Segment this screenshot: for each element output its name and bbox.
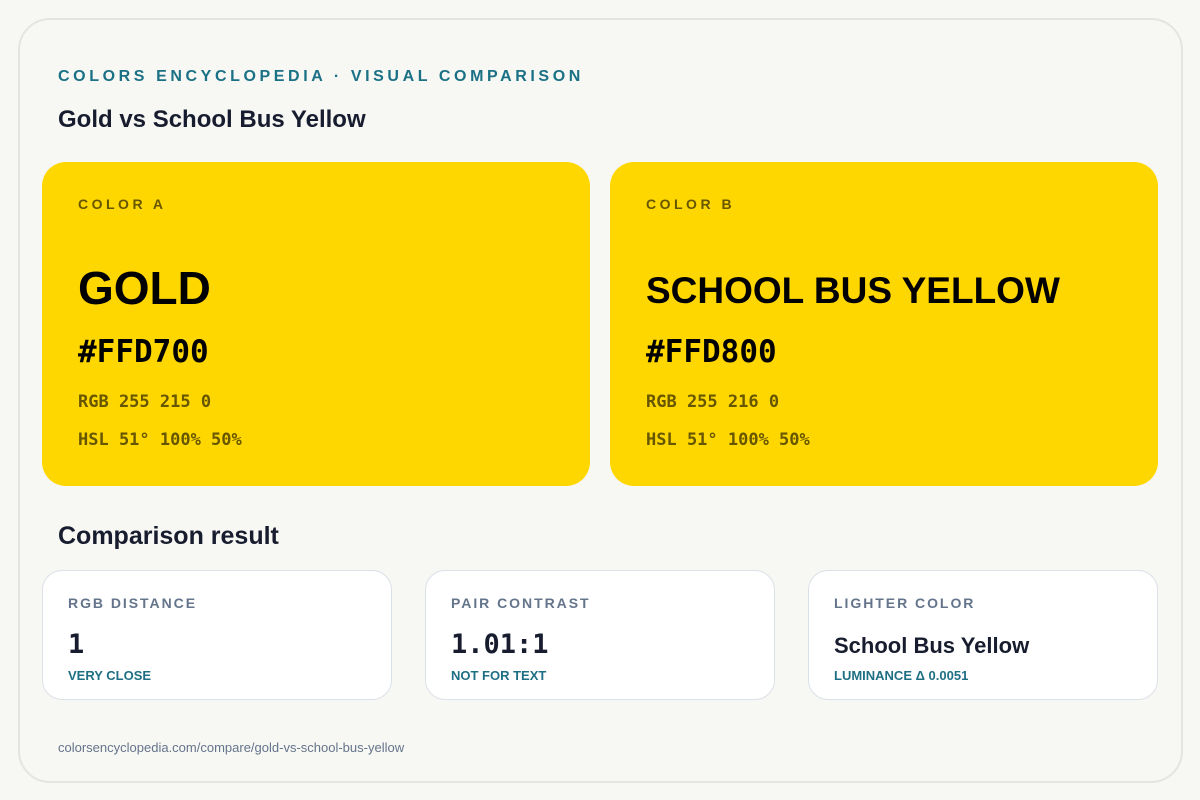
RGB distance label: RGB DISTANCE [68,595,197,611]
RGB distance note: VERY CLOSE [68,668,151,683]
footer source: colorsencyclopedia.com/compare/gold-vs-school-bus-yellow [58,740,404,755]
comparison heading: Comparison result [58,522,279,550]
lighter color note: LUMINANCE Δ 0.0051 [834,668,968,683]
color B label: COLOR B [646,196,735,212]
eyebrow: COLORS ENCYCLOPEDIA · VISUAL COMPARISON [58,68,584,85]
card: pair contrast [425,570,775,700]
color A hex: #FFD700 [78,334,209,370]
card: RGB distance [42,570,392,700]
pair contrast label: PAIR CONTRAST [451,595,591,611]
lighter color value: School Bus Yellow [834,633,1029,658]
title: Gold vs School Bus Yellow [58,106,366,133]
color A RGB: RGB 255 215 0 [78,392,211,412]
pair contrast value: 1.01:1 [451,629,549,660]
RGB distance value: 1 [68,629,84,660]
color A label: COLOR A [78,196,167,212]
panel: color A [42,162,590,486]
color B HSL: HSL 51° 100% 50% [646,430,810,450]
card: lighter color [808,570,1158,700]
panel: color B [610,162,1158,486]
color B name: SCHOOL BUS YELLOW [646,270,1060,311]
color B hex: #FFD800 [646,334,777,370]
color A HSL: HSL 51° 100% 50% [78,430,242,450]
pair contrast note: NOT FOR TEXT [451,668,546,683]
color A name: GOLD [78,262,211,314]
lighter color label: LIGHTER COLOR [834,595,975,611]
color B RGB: RGB 255 216 0 [646,392,779,412]
